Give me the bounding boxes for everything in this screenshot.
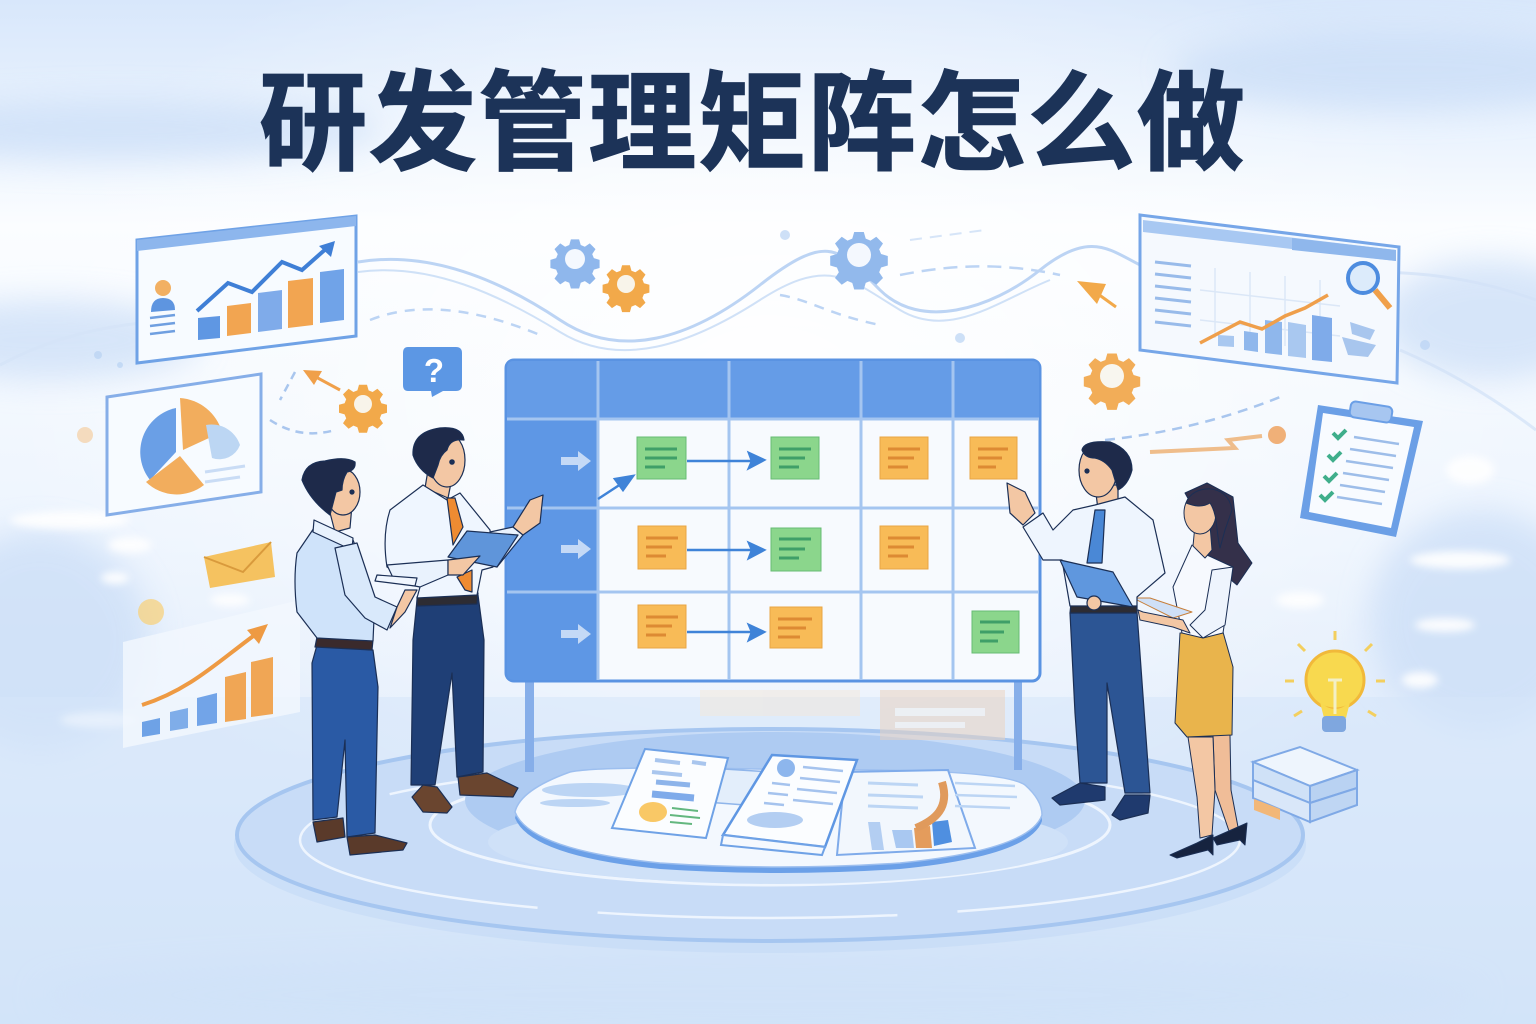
person: man left [295, 459, 417, 855]
icon: envelope [204, 542, 275, 588]
header row [507, 361, 1039, 418]
dashed lines right [1105, 395, 1286, 452]
chart panel top left [137, 216, 356, 363]
person: woman right [1133, 483, 1252, 858]
neck [328, 505, 352, 532]
arm [335, 543, 397, 630]
head [326, 469, 360, 515]
title: 研发管理矩阵怎么做 [259, 63, 1245, 184]
hands [448, 556, 480, 575]
flow arrows [598, 453, 764, 640]
person: man right [1007, 442, 1165, 820]
torso [385, 485, 493, 598]
tablet [375, 575, 417, 586]
legs [411, 595, 484, 785]
light bulb [1285, 631, 1385, 732]
sleeve [1190, 567, 1233, 638]
head [1193, 525, 1212, 558]
matrix board [506, 360, 1040, 681]
hand [390, 590, 417, 628]
chart panel top right [1140, 215, 1399, 383]
legs [1070, 612, 1150, 793]
documents on platform [612, 749, 1017, 855]
tablet [1133, 598, 1192, 618]
torso [1023, 497, 1165, 606]
torso [295, 528, 375, 641]
pointing arm [490, 527, 523, 567]
stack of books [1253, 747, 1357, 822]
matrix board legs [525, 680, 1022, 772]
forearm [387, 560, 448, 587]
skirt [1175, 632, 1233, 737]
platform [234, 729, 1306, 953]
growth chart lower left [123, 600, 300, 748]
legs [1213, 735, 1238, 834]
person: man with orange tie [385, 428, 543, 813]
reflection under board [700, 690, 1005, 740]
gears top [550, 232, 888, 312]
hair back [1185, 483, 1252, 585]
pie chart panel [107, 374, 261, 515]
tablet [448, 531, 518, 567]
head [429, 433, 465, 487]
legs [312, 645, 378, 837]
arrow orange top right [1077, 281, 1116, 307]
connecting wave lines [358, 230, 1140, 350]
clipboard [1300, 401, 1423, 537]
gear right [1084, 353, 1140, 410]
decorative dot [138, 599, 164, 625]
sticky notes [637, 437, 1019, 653]
hand [1007, 483, 1035, 525]
icon: question bubble: ? [424, 352, 444, 389]
neck [425, 470, 452, 498]
note lines [645, 449, 1010, 641]
row arrows [561, 451, 591, 644]
top [1173, 545, 1233, 638]
neck [1095, 485, 1118, 510]
row header column [507, 418, 597, 680]
forearm [1138, 610, 1190, 633]
small arrow and gear left [270, 370, 387, 433]
icon: question bubble [403, 347, 462, 397]
laptop [1060, 560, 1133, 607]
head [1079, 443, 1117, 497]
